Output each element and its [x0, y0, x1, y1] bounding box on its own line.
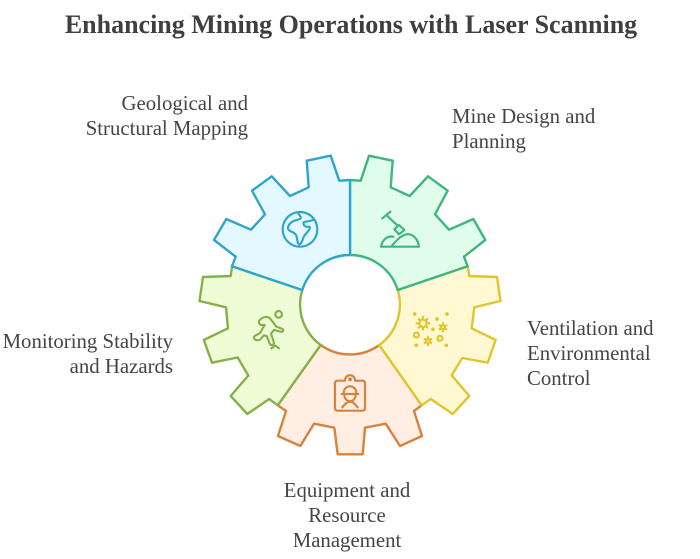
title: Enhancing Mining Operations with Laser Scanning	[65, 10, 637, 39]
icon: clipboard with hard hat worker	[335, 375, 365, 411]
label: equipment and resource management: Management	[293, 529, 401, 552]
label: equipment and resource management: Resource	[308, 504, 386, 527]
icon: shovel and mound	[381, 212, 419, 247]
gear diagram	[200, 156, 500, 454]
label: mine design and planning: Planning	[452, 130, 526, 153]
segment: mine design and planning	[350, 156, 485, 290]
icon: running figure	[254, 311, 283, 348]
label: ventilation and environmental control: Ventilation and	[527, 317, 654, 340]
label: geological and structural mapping: Structural Mapping	[86, 117, 248, 140]
label: ventilation and environmental control: Control	[527, 367, 591, 390]
segment: ventilation and environmental control	[379, 266, 500, 414]
segment: geological and structural mapping	[214, 156, 350, 290]
label: monitoring stability and hazards: and Hazards	[70, 355, 173, 378]
label: monitoring stability and hazards: Monitoring Stability	[3, 330, 174, 353]
icon: dust and particles	[413, 312, 449, 347]
label: ventilation and environmental control: Environmental	[527, 342, 651, 365]
label: geological and structural mapping: Geological and	[122, 92, 249, 115]
segment: equipment and resource management	[278, 345, 422, 454]
icon: globe	[283, 212, 317, 247]
segment: monitoring stability and hazards	[200, 266, 321, 414]
label: mine design and planning: Mine Design and	[452, 105, 596, 128]
label: equipment and resource management: Equipment and	[284, 479, 411, 502]
